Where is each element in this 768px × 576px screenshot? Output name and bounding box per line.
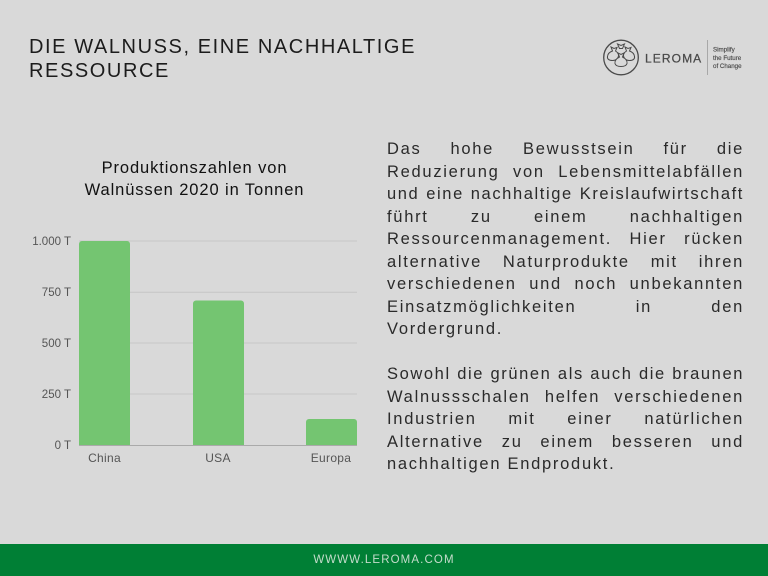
- paragraph 2: nachhaltigen Endprodukt.: [387, 455, 615, 473]
- chart heading: [84, 159, 304, 199]
- title: RESSOURCE: [29, 60, 170, 82]
- y axis labels: 750 T: [42, 287, 71, 299]
- y axis labels: 0 T: [55, 440, 71, 452]
- paragraph 1: Einsatzmöglichkeiten in den: [387, 298, 744, 316]
- x axis labels: [88, 451, 351, 465]
- bar chart: [32, 236, 357, 465]
- bar: Europa: [306, 419, 357, 445]
- text block: body copy: [387, 140, 744, 473]
- paragraph 2: Alternative zu einem besseren und: [387, 432, 744, 450]
- icon: sacks in circle: [604, 40, 638, 75]
- paragraph 1: Reduzierung von Lebensmittelabfällen: [387, 162, 744, 180]
- paragraph 1: [387, 140, 744, 338]
- y axis labels: 500 T: [42, 338, 71, 350]
- paragraph 1: alternative Naturprodukte mit ihren: [387, 252, 744, 270]
- axis baseline: [79, 444, 357, 446]
- bar: China: [79, 241, 130, 445]
- paragraph 2: Walnussschalen helfen verschiedenen: [387, 388, 744, 406]
- paragraph 2: Sowohl die grünen als auch die braunen: [387, 365, 744, 383]
- paragraph 2: [387, 365, 744, 473]
- y axis labels: 1.000 T: [32, 236, 71, 248]
- y axis labels: 250 T: [42, 389, 71, 401]
- paragraph 1: Das hohe Bewusstsein für die: [387, 140, 744, 158]
- chart heading: Produktionszahlen von: [102, 159, 287, 177]
- x axis labels: China: [88, 451, 121, 465]
- bar: USA: [193, 300, 244, 445]
- y axis labels: [32, 236, 71, 452]
- divider: [707, 40, 708, 75]
- footer bar: WWWW.LEROMA.COM: [313, 554, 455, 566]
- paragraph 2: Industrien mit einer natürlichen: [387, 410, 744, 428]
- tagline: of Change: [713, 63, 742, 70]
- paragraph 1: Vordergrund.: [387, 320, 503, 338]
- chart heading: Walnüssen 2020 in Tonnen: [85, 181, 304, 199]
- tagline: Simplify: [713, 46, 736, 54]
- x axis labels: Europa: [311, 451, 351, 465]
- paragraph 1: Ressourcenmanagement. Hier rücken: [387, 230, 744, 248]
- title: DIE WALNUSS, EINE NACHHALTIGE: [29, 36, 416, 58]
- paragraph 1: und eine nachhaltige Kreislaufwirtschaft: [387, 185, 744, 203]
- title: [29, 36, 416, 82]
- tagline: [713, 46, 742, 70]
- x axis labels: USA: [205, 451, 231, 465]
- logo: Leroma: [603, 40, 742, 76]
- footer bar: [0, 544, 768, 576]
- wordmark: LEROMA: [645, 52, 702, 66]
- paragraph 1: verschiedenen und noch unbekannten: [387, 275, 744, 293]
- tagline: the Future: [713, 55, 742, 62]
- paragraph 1: führt zu einem nachhaltigen: [387, 208, 744, 226]
